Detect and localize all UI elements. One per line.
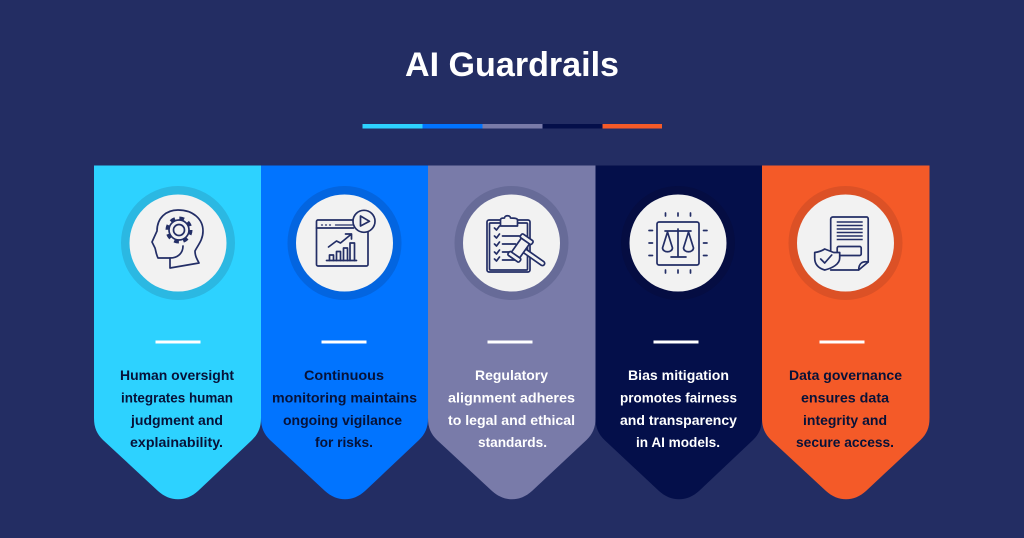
text: integrity and [803,412,887,428]
title: AI Guardrails [405,46,619,84]
divider [488,340,532,344]
text: secure access. [796,434,894,450]
text: alignment adheres [448,390,575,406]
colour bar [362,124,662,128]
text: and transparency [620,412,737,428]
text [448,367,575,450]
text: monitoring maintains [272,390,417,406]
text: explainability. [130,434,223,450]
panel: continuous monitoring [261,166,428,499]
icon: clipboard and gavel [487,216,552,275]
icon: chip with scales [649,213,707,273]
text: integrates human [121,390,233,406]
panel: regulatory alignment [428,166,596,499]
panel: data governance [762,166,930,499]
text: judgment and [130,412,223,428]
text [789,367,902,450]
text: to legal and ethical [448,412,575,428]
icon: head with gear [152,210,203,268]
icon: document with shield [815,217,868,270]
text: Regulatory [475,367,548,383]
text: Continuous [304,367,384,383]
icon: browser chart [316,210,375,266]
divider [820,340,864,344]
divider [654,340,698,344]
text: in AI models. [636,434,720,450]
text: for risks. [315,434,373,450]
divider [156,340,200,344]
text: Data governance [789,367,902,383]
text: standards. [478,434,547,450]
panel: bias mitigation [596,166,762,499]
panel: human oversight [94,166,261,499]
text: ensures data [801,390,889,406]
text: Human oversight [120,367,234,383]
text: promotes fairness [620,390,737,406]
text: ongoing vigilance [283,412,402,428]
text: Bias mitigation [628,367,729,383]
text [620,367,737,450]
divider [322,340,366,344]
text [120,367,234,450]
text [272,367,417,450]
